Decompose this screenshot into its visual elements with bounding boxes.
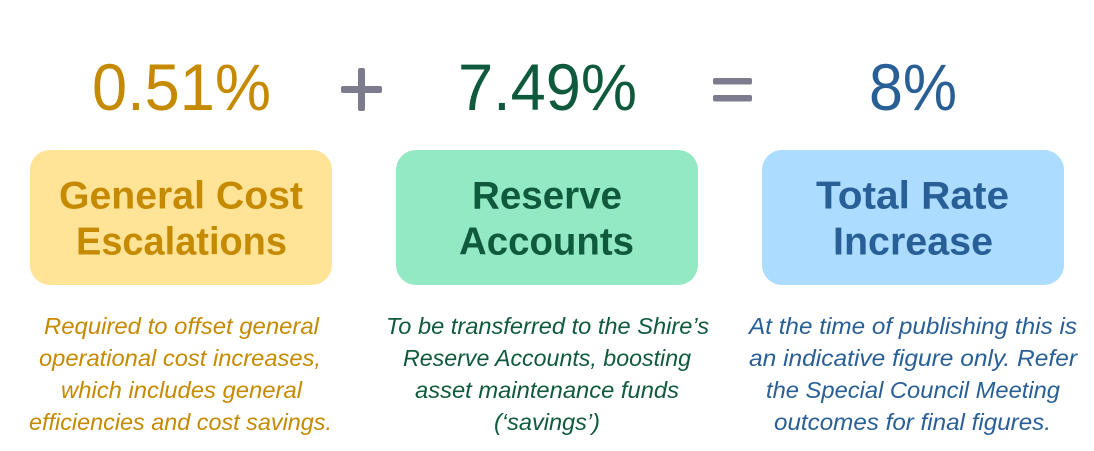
text block: reserve accounts description: To be transferred to the Shire’s bbox=[386, 313, 709, 339]
text block: general cost description: efficiencies and cost savings. bbox=[29, 409, 332, 435]
text block: total rate description: the Special Council Meeting bbox=[766, 377, 1060, 403]
panel: reserve accounts bbox=[396, 150, 698, 285]
text block: total rate description: an indicative figure only. Refer bbox=[749, 345, 1078, 371]
text block: total rate description: At the time of publishing this is bbox=[747, 313, 1077, 339]
text block: reserve accounts description bbox=[386, 313, 709, 435]
text block: total rate description: outcomes for final figures. bbox=[774, 409, 1051, 435]
figure: general cost percentage: 0.51% bbox=[92, 50, 271, 124]
text block: general cost description: which includes general bbox=[61, 377, 303, 403]
text block: general cost description bbox=[29, 313, 332, 435]
panel: reserve accounts: Reserve bbox=[472, 174, 622, 218]
panel: total rate increase bbox=[762, 150, 1064, 285]
icon: equals operator bbox=[713, 78, 752, 102]
icon: plus operator bbox=[341, 68, 382, 111]
text block: total rate description bbox=[747, 313, 1078, 435]
text block: reserve accounts description: Reserve Accounts, boosting bbox=[403, 345, 691, 371]
panel: general cost escalations bbox=[30, 150, 332, 285]
panel: total rate increase: Total Rate bbox=[816, 174, 1009, 218]
text block: reserve accounts description: (‘savings’) bbox=[494, 409, 600, 435]
text block: general cost description: operational cost increases, bbox=[39, 345, 321, 371]
text block: reserve accounts description: asset maintenance funds bbox=[415, 377, 679, 403]
figure: reserve accounts percentage: 7.49% bbox=[458, 50, 637, 124]
figure: total percentage: 8% bbox=[869, 50, 957, 124]
panel: total rate increase: Increase bbox=[833, 220, 993, 264]
panel: reserve accounts: Accounts bbox=[459, 220, 634, 264]
panel: general cost escalations: General Cost bbox=[59, 174, 303, 218]
text block: general cost description: Required to offset general bbox=[44, 313, 320, 339]
panel: general cost escalations: Escalations bbox=[76, 220, 287, 264]
